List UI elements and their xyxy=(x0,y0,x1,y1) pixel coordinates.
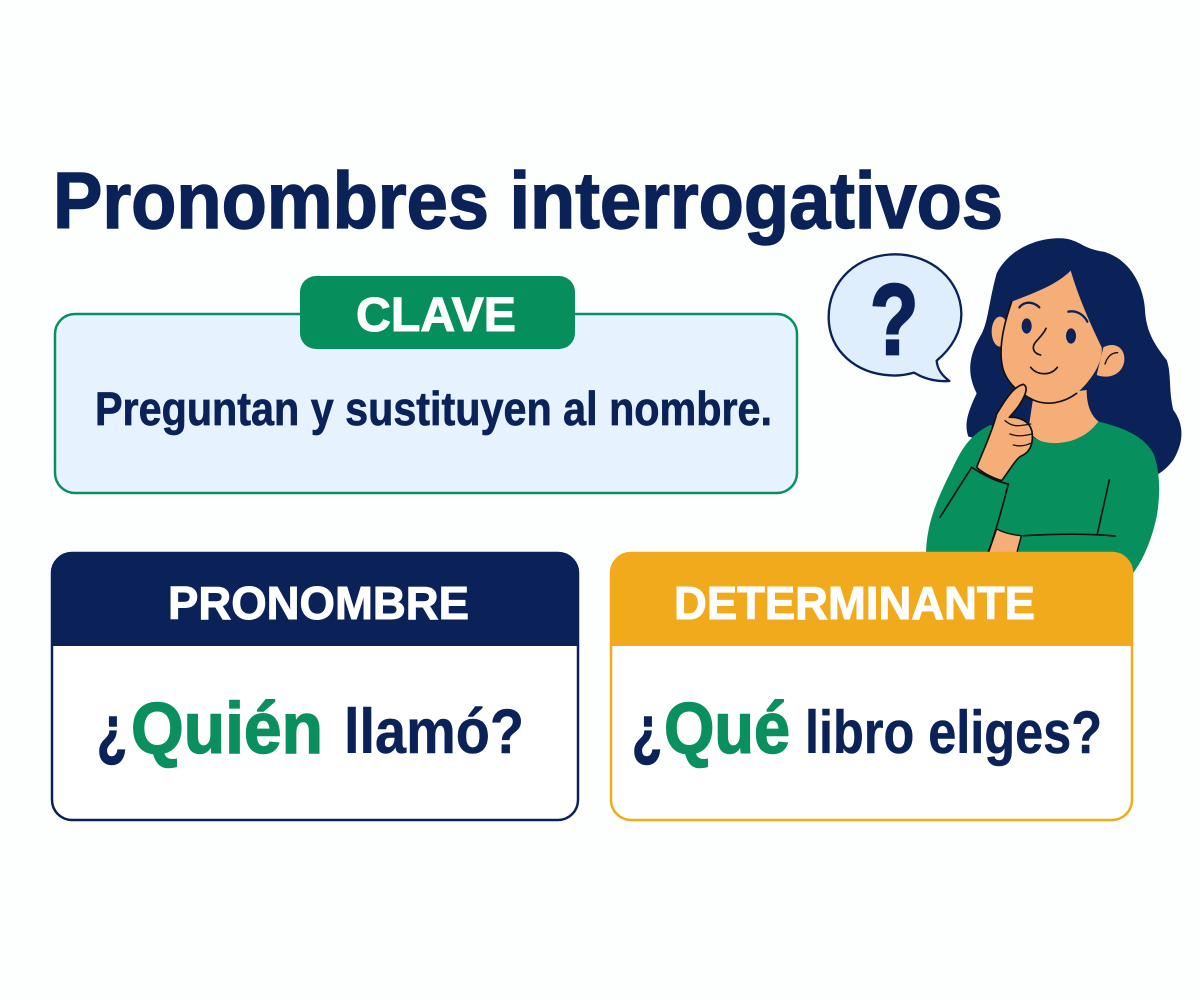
pronombre header xyxy=(51,552,579,646)
title: Pronombres interrogativos xyxy=(53,156,1003,245)
pronombre example: ¿ xyxy=(97,692,127,768)
determinante example xyxy=(632,689,1102,769)
lower hand xyxy=(988,529,1021,553)
pronombre example xyxy=(97,689,524,769)
hair xyxy=(966,238,1181,474)
face details xyxy=(1019,303,1087,374)
panel: clave xyxy=(55,276,797,493)
left ear xyxy=(992,317,1008,347)
speech bubble xyxy=(829,254,961,381)
clave text: Preguntan y sustituyen al nombre. xyxy=(95,382,772,435)
determinante header: DETERMINANTE xyxy=(674,577,1035,629)
right ear xyxy=(1097,345,1124,377)
face xyxy=(1001,271,1102,403)
clave panel background xyxy=(55,314,797,493)
determinante example: Qué xyxy=(664,689,790,769)
hand xyxy=(977,384,1032,481)
determinante example: libro eliges? xyxy=(805,699,1102,766)
illustration: thinking woman with speech bubble xyxy=(829,238,1181,575)
sweater xyxy=(926,422,1159,575)
pronombre header: PRONOMBRE xyxy=(168,577,469,629)
clave badge xyxy=(300,276,575,349)
determinante header xyxy=(610,552,1133,646)
neck xyxy=(1028,390,1100,444)
determinante example: ¿ xyxy=(632,692,662,768)
panel: determinante xyxy=(610,552,1133,820)
determinante card body xyxy=(611,553,1132,820)
pronombre card body xyxy=(52,553,578,820)
pronombre example: Quién xyxy=(131,689,323,769)
speech bubble: ? xyxy=(870,264,918,376)
sleeve fold lines xyxy=(940,467,1115,552)
clave badge: CLAVE xyxy=(356,289,516,342)
panel: pronombre xyxy=(51,552,579,820)
pronombre example: llamó? xyxy=(344,697,524,767)
